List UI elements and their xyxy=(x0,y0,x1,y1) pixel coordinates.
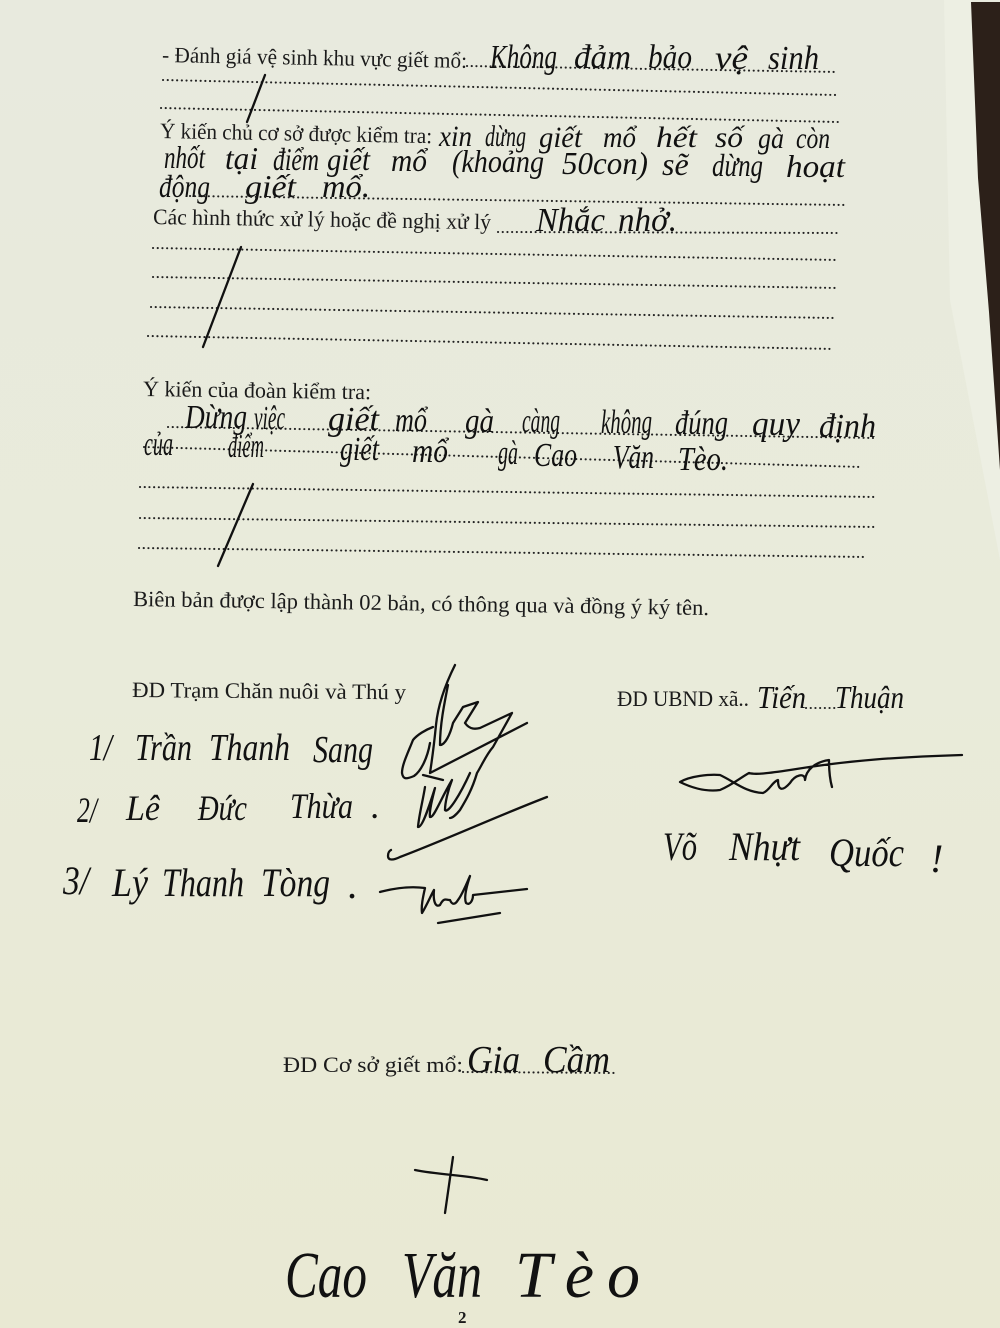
handwriting: commune official name: Võ xyxy=(663,824,697,869)
handwriting: team opinion 1: càng xyxy=(522,403,560,440)
handwriting: hygiene: bảo xyxy=(648,39,692,76)
statement line: Biên bản được lập thành 02 bản, có thông qua và đồng ý ký tên. xyxy=(133,586,709,620)
handwriting: owner opinion 1: hết xyxy=(656,121,698,154)
section: hygiene assessment xyxy=(161,39,838,122)
handwriting: name 1 xyxy=(89,727,373,771)
handwriting: name 3: . xyxy=(348,862,358,907)
handwriting: team opinion 2: của xyxy=(144,426,173,463)
handwriting: handling xyxy=(535,202,677,239)
printed label: hygiene: - Đánh giá vệ sinh khu vực giết mổ: xyxy=(162,42,467,73)
handwriting: owner opinion 3: mổ. xyxy=(322,168,370,204)
handwriting: owner opinion 2: mổ xyxy=(391,142,429,178)
handwriting: handling: nhở. xyxy=(618,202,677,239)
handwriting: team opinion 1 xyxy=(184,399,876,445)
handwriting: name 2: Lê xyxy=(125,788,160,828)
signature: commune official xyxy=(680,755,962,793)
paper right margin xyxy=(944,0,1000,560)
handwriting: hygiene xyxy=(489,39,819,77)
dark table edge xyxy=(971,2,1000,470)
printed label: owner opinion: Ý kiến chủ cơ sở được kiểm tra: xyxy=(160,118,432,148)
handwriting: name 1: Thanh xyxy=(209,727,290,769)
handwriting: name 2: Đức xyxy=(197,788,247,828)
handwriting: team opinion 2: Cao xyxy=(534,437,577,474)
handwriting: handling: Nhắc xyxy=(535,202,605,239)
handwriting: name 3: Tòng xyxy=(261,860,330,905)
handwriting: team opinion 1: đúng xyxy=(675,405,728,442)
handwriting: commune name: Thuận xyxy=(835,679,904,715)
signature cross xyxy=(415,1157,487,1213)
handwriting: owner opinion 2: dừng xyxy=(712,147,763,183)
handwriting: facility owner xyxy=(285,1239,640,1312)
handwriting: owner opinion 2: 50con) xyxy=(562,145,648,181)
handwriting: team opinion 2: Tèo. xyxy=(678,441,728,478)
section: owner opinion xyxy=(159,118,846,205)
handwriting: owner opinion 3: giết xyxy=(245,168,297,204)
handwriting: owner opinion 1 xyxy=(438,120,830,155)
section: veterinary station signatures xyxy=(62,665,547,923)
handwriting: owner opinion 1: xin xyxy=(438,120,472,153)
handwriting: team opinion 2: giết xyxy=(340,431,380,468)
printed label: facility: ĐD Cơ sở giết mổ: xyxy=(283,1052,463,1077)
handwriting: commune name: Tiến xyxy=(757,679,806,715)
handwriting: name 2: . xyxy=(371,786,380,826)
handwriting: commune official name xyxy=(663,824,943,881)
printed label: commune: ĐD UBND xã.. xyxy=(617,686,749,711)
handwriting: owner opinion 3 xyxy=(159,168,370,204)
slash strike 3 xyxy=(218,484,253,566)
handwriting: owner opinion 2: nhốt xyxy=(164,139,206,175)
handwriting: commune official name: Nhựt xyxy=(728,824,801,869)
handwriting: owner opinion 2: tại xyxy=(225,140,258,176)
handwriting: hygiene: sinh xyxy=(768,40,819,77)
handwriting: owner opinion 3: động xyxy=(159,168,210,204)
signature 3 xyxy=(380,876,527,923)
signature 1 xyxy=(402,665,527,818)
section: slaughter facility signature xyxy=(283,1039,640,1312)
handwriting: name 3: Lý xyxy=(111,860,148,905)
printed label: station: ĐD Trạm Chăn nuôi và Thú y xyxy=(132,677,406,704)
handwriting: facility owner: Tèo xyxy=(515,1239,640,1312)
handwriting: team opinion 2: gà xyxy=(498,435,518,472)
handwriting: name 2: 2/ xyxy=(77,790,99,830)
handwriting: owner opinion 2: hoạt xyxy=(786,148,846,184)
handwriting: team opinion 1: việc xyxy=(254,400,285,437)
handwriting: hygiene: vệ xyxy=(715,40,749,77)
handwriting: team opinion 1: mổ xyxy=(395,402,429,439)
handwriting: owner opinion 1: số xyxy=(715,121,746,154)
handwriting: name 1: Sang xyxy=(313,729,373,771)
slash strike 2 xyxy=(203,247,241,347)
handwriting: owner opinion 1: mổ xyxy=(603,121,638,154)
handwriting: team opinion 1: giết xyxy=(328,401,381,438)
section: inspection team opinion xyxy=(139,376,876,566)
handwriting: team opinion 2: Văn xyxy=(613,439,654,476)
section: handling measures xyxy=(148,202,838,349)
handwriting: name 2 xyxy=(77,786,380,830)
slash strike 1 xyxy=(247,75,265,122)
section: commune committee signature xyxy=(617,679,962,881)
signature 2 xyxy=(388,773,547,860)
handwriting: hygiene: Không xyxy=(489,39,557,76)
handwriting: owner opinion 1: gà xyxy=(758,122,784,155)
handwriting: facility type: Gia xyxy=(467,1039,520,1081)
handwriting: owner opinion 2 xyxy=(164,139,846,184)
handwriting: name 2: Thừa xyxy=(290,786,353,826)
handwriting: name 3: Thanh xyxy=(162,860,244,905)
handwriting: commune official name: Quốc xyxy=(829,830,904,875)
handwriting: owner opinion 2: giết xyxy=(327,141,371,177)
handwriting: commune name xyxy=(757,679,904,715)
handwriting: team opinion 1: không xyxy=(601,404,652,441)
handwriting: owner opinion 1: còn xyxy=(796,122,830,155)
handwriting: team opinion 1: định xyxy=(819,408,876,445)
printed label: handling: Các hình thức xử lý hoặc đề nghị xử lý xyxy=(153,204,491,234)
handwriting: name 3 xyxy=(62,858,358,907)
handwriting: owner opinion 1: giết xyxy=(539,121,583,154)
handwriting: owner opinion 2: sẽ xyxy=(662,146,689,182)
handwriting: name 3: 3/ xyxy=(62,858,92,903)
handwriting: team opinion 2 xyxy=(144,426,728,478)
handwriting: team opinion 1: Dừng xyxy=(184,399,247,436)
handwriting: team opinion 1: quy xyxy=(752,406,801,443)
handwriting: name 1: Trần xyxy=(135,727,192,769)
handwriting: facility type: Cầm xyxy=(543,1039,610,1081)
handwriting: team opinion 2: điểm xyxy=(228,428,264,465)
handwriting: team opinion 2: mổ xyxy=(412,433,450,470)
handwriting: owner opinion 2: (khoảng xyxy=(452,143,544,179)
handwriting: facility owner: Cao xyxy=(285,1239,367,1312)
handwriting: commune official name: ! xyxy=(930,836,943,881)
handwriting: owner opinion 2: điểm xyxy=(273,141,319,177)
printed label: team opinion: Ý kiến của đoàn kiểm tra: xyxy=(143,376,371,404)
handwriting: name 1: 1/ xyxy=(89,727,115,769)
handwriting: facility owner: Văn xyxy=(402,1239,482,1312)
handwriting: hygiene: đảm xyxy=(574,39,631,76)
page number: 2 xyxy=(458,1308,466,1327)
handwriting: team opinion 1: gà xyxy=(465,403,494,440)
handwriting: facility type xyxy=(467,1039,610,1081)
handwriting: owner opinion 1: dừng xyxy=(485,120,526,153)
